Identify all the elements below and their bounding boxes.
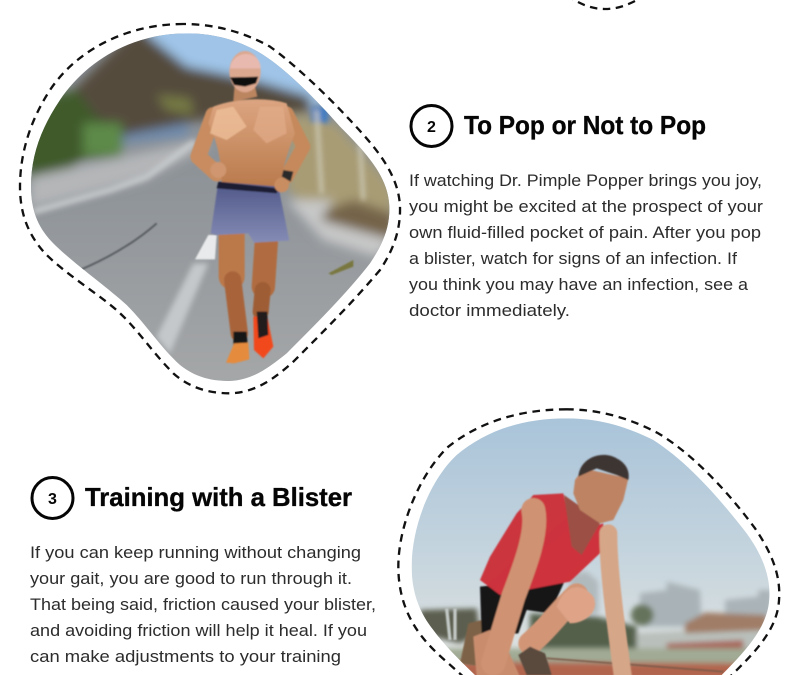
dashed blob outline bbox=[20, 24, 400, 393]
runner bbox=[198, 51, 303, 363]
dashed outline: previous section blob bbox=[567, 0, 645, 9]
text block: step 2 body: doctor immediately. bbox=[409, 302, 570, 320]
text block: step 3 body: and avoiding friction will help it heal. If you bbox=[30, 622, 367, 640]
track scene bbox=[407, 413, 780, 675]
number badge 3 bbox=[32, 478, 73, 518]
legs bbox=[218, 233, 246, 288]
number badge 3: 3 bbox=[48, 491, 57, 508]
heading: step 2 with number badge bbox=[411, 106, 706, 146]
number badge 2: 2 bbox=[427, 119, 436, 136]
shorts bbox=[211, 182, 289, 243]
text block: step 2 body: If watching Dr. Pimple Popper brings you joy, bbox=[409, 172, 762, 190]
text block: step 3 body bbox=[30, 544, 376, 666]
text block: step 3 body: can make adjustments to your training bbox=[30, 648, 341, 666]
torso and arms bbox=[198, 115, 217, 173]
number badge 2 bbox=[411, 106, 452, 146]
text block: step 3 body: If you can keep running without changing bbox=[30, 544, 361, 562]
text block: step 2 body: a blister, watch for signs of an infection. If bbox=[409, 250, 737, 268]
heading: step 3 with number badge bbox=[32, 478, 352, 518]
photo: shirtless runner on road in dashed blob bbox=[20, 20, 403, 393]
text block: step 2 body: you might be excited at the prospect of your bbox=[409, 198, 764, 216]
text block: step 3 body: That being said, friction caused your blister, bbox=[30, 596, 376, 614]
text block: step 2 body: own fluid-filled pocket of pain. After you pop bbox=[409, 224, 761, 242]
text block: step 3 body: your gait, you are good to run through it. bbox=[30, 570, 352, 588]
photo: sprinter in red tank at starting position in dashed blob bbox=[398, 409, 780, 675]
dashed blob outline bbox=[398, 409, 779, 675]
heading text: To Pop or Not to Pop: To Pop or Not to Pop bbox=[464, 110, 706, 140]
text block: step 2 body: you think you may have an infection, see a bbox=[409, 276, 749, 294]
road scene bbox=[31, 33, 390, 381]
road markings bbox=[195, 235, 217, 259]
heading text: Training with a Blister: Training with a Blister bbox=[85, 482, 352, 512]
text block: step 2 body bbox=[409, 172, 764, 320]
athlete bbox=[460, 455, 629, 675]
